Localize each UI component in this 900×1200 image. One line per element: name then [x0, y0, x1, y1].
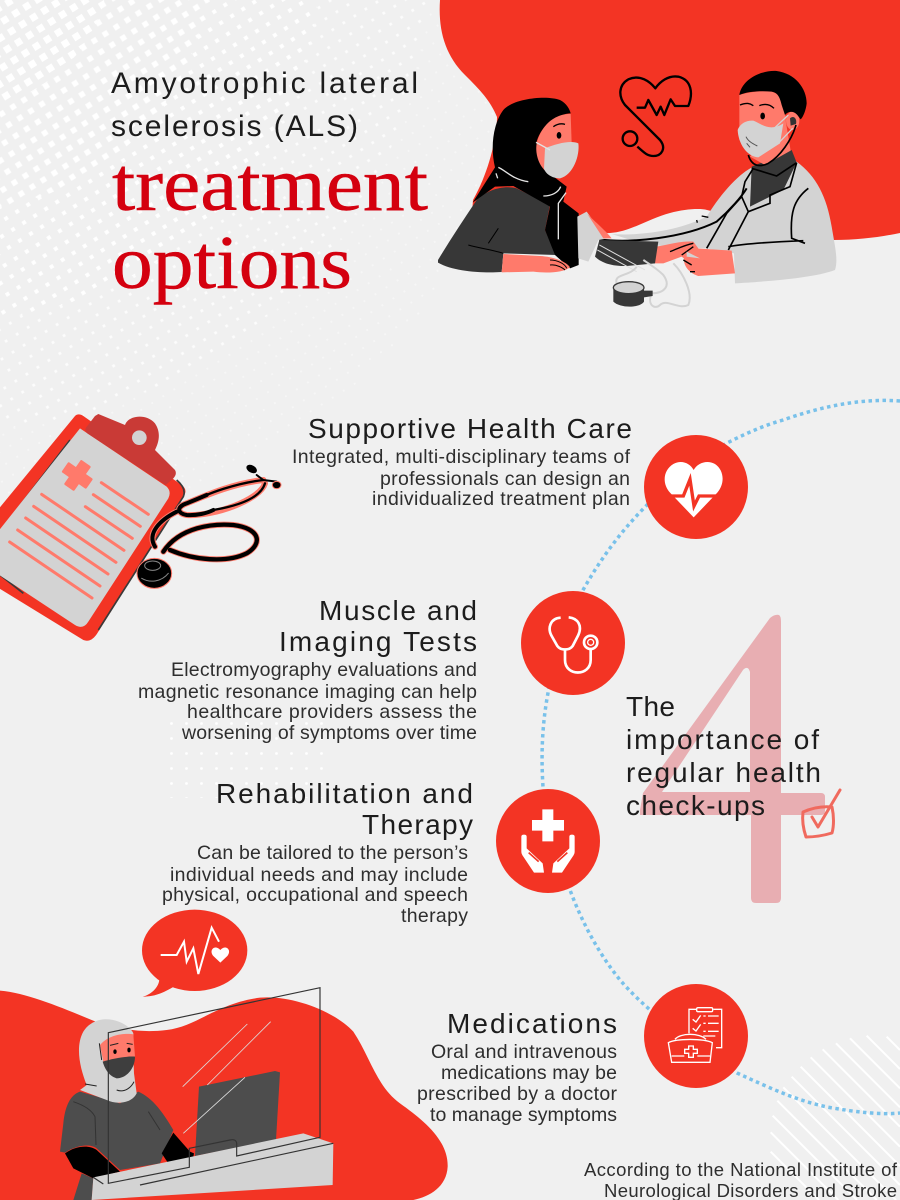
- heading: importance of regular check-ups: [626, 691, 821, 821]
- blood pressure gauge: [613, 260, 690, 307]
- heading: importance of regular check-ups: regular health: [626, 757, 821, 788]
- patient: [438, 98, 658, 272]
- section: muscle and imaging tests: Electromyography evaluations and: [171, 659, 477, 681]
- source note: [584, 1159, 898, 1200]
- source note: According to the National Institute of: [584, 1159, 898, 1180]
- doctor: [599, 150, 836, 283]
- dotted arc: [542, 400, 900, 1114]
- doctor head: [738, 71, 807, 166]
- icon: nurse cap and clipboard: [644, 984, 748, 1088]
- section: medications: to manage symptoms: [430, 1104, 617, 1126]
- section: medications: Medications: [447, 1008, 617, 1039]
- section: supportive health care: [292, 413, 632, 510]
- title: [111, 67, 428, 305]
- title: options: [112, 221, 352, 305]
- big number 4: [640, 615, 825, 903]
- icon: caring hands with cross: [496, 789, 600, 893]
- section: medications: [417, 1008, 618, 1126]
- section: rehabilitation and therapy: physical, occupational and speech: [162, 884, 468, 906]
- section: rehabilitation and therapy: Therapy: [362, 809, 473, 840]
- heading: importance of regular check-ups: The: [626, 691, 675, 722]
- monitor: [195, 1071, 280, 1156]
- white diagonal lines: [771, 1036, 900, 1200]
- section: muscle and imaging tests: healthcare providers assess the: [187, 701, 477, 723]
- icon: heart stethoscope: [620, 76, 691, 156]
- section: supportive health care: Integrated, multi-disciplinary teams of: [292, 446, 631, 468]
- section: supportive health care: Supportive Health Care: [308, 413, 632, 444]
- section: rehabilitation and therapy: Rehabilitation and: [216, 778, 473, 809]
- section: medications: medications may be: [441, 1062, 617, 1084]
- clipboard: [0, 414, 185, 641]
- section: rehabilitation and therapy: [162, 778, 473, 927]
- section: medications: prescribed by a doctor: [417, 1083, 618, 1105]
- title: treatment: [112, 143, 428, 227]
- section: muscle and imaging tests: Imaging Tests: [279, 626, 477, 657]
- plexiglass shield: [93, 988, 333, 1185]
- desk: [92, 1133, 333, 1200]
- section: rehabilitation and therapy: individual needs and may include: [170, 864, 468, 886]
- icon: stethoscope: [521, 591, 625, 695]
- section: supportive health care: professionals can design an: [380, 468, 630, 490]
- stethoscope: [137, 463, 281, 588]
- section: muscle and imaging tests: worsening of symptoms over time: [181, 722, 477, 744]
- illustration: patient and doctor: [438, 71, 836, 307]
- section: rehabilitation and therapy: therapy: [401, 905, 468, 927]
- icon: heart pulse: [644, 435, 748, 539]
- figure: [60, 1019, 194, 1200]
- bottom red blob: [0, 991, 448, 1200]
- heading: importance of regular check-ups: importance of: [626, 724, 819, 755]
- title: Amyotrophic lateral: [111, 67, 418, 100]
- speech bubble with pulse: [142, 910, 247, 997]
- section: muscle and imaging tests: [138, 595, 477, 744]
- illustration: masked woman at computer: [60, 988, 333, 1200]
- section: muscle and imaging tests: Muscle and: [319, 595, 477, 626]
- section: medications: Oral and intravenous: [431, 1041, 617, 1063]
- halftone dot background: [0, 0, 540, 798]
- heading: importance of regular check-ups: check-ups: [626, 790, 765, 821]
- top red blob: [440, 0, 900, 240]
- icon: checkbox: [803, 790, 840, 837]
- illustration: clipboard and stethoscope: [0, 414, 281, 641]
- title: scelerosis (ALS): [111, 110, 358, 143]
- section: rehabilitation and therapy: Can be tailored to the person’s: [197, 842, 468, 864]
- section: muscle and imaging tests: magnetic resonance imaging can help: [138, 681, 477, 703]
- section: supportive health care: individualized treatment plan: [372, 488, 630, 510]
